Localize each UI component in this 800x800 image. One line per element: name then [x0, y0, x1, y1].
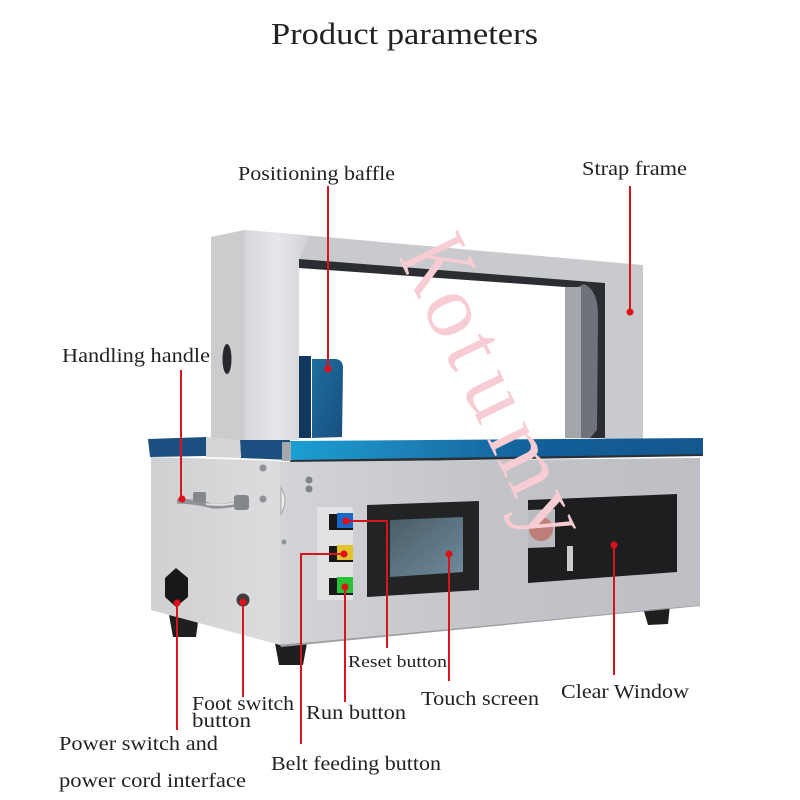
handling handle	[177, 492, 249, 510]
line: run	[344, 587, 346, 702]
strap frame	[211, 230, 643, 440]
line: touch	[448, 554, 450, 681]
label: positioning baffle: Positioning baffle	[238, 164, 395, 185]
button panel	[317, 507, 353, 600]
feet	[169, 605, 670, 665]
positioning baffle	[299, 356, 343, 438]
label: touch screen: Touch screen	[421, 689, 539, 710]
power socket	[165, 568, 188, 607]
label: clear window: Clear Window	[561, 682, 689, 703]
line: belt feeding	[301, 554, 344, 744]
label: strap frame: Strap frame	[582, 159, 687, 180]
machine	[148, 230, 703, 665]
label: foot switch button: Foot switch	[192, 694, 294, 715]
label: foot switch button	[192, 694, 294, 732]
line: power	[176, 603, 178, 730]
line: strap frame	[629, 186, 631, 312]
machine body	[151, 457, 700, 647]
line: positioning baffle	[327, 186, 329, 369]
label: reset button: Reset button	[348, 652, 448, 671]
label: run button: Run button	[306, 703, 406, 724]
line: handling handle	[180, 370, 182, 499]
label: power switch: Power switch and	[59, 734, 218, 755]
line: foot switch	[242, 602, 244, 697]
callout dots	[174, 308, 634, 606]
line: clear	[613, 545, 615, 675]
line: reset	[346, 521, 387, 648]
label: belt feeding button: Belt feeding button	[271, 754, 441, 775]
foot switch	[236, 594, 250, 606]
clear window	[528, 494, 677, 583]
label: power switch	[59, 734, 246, 792]
watermark: otumy	[403, 269, 610, 555]
label: handling handle: Handling handle	[62, 346, 210, 367]
watermark: K	[378, 218, 499, 310]
label: foot switch button: button	[192, 711, 251, 732]
callout lines	[177, 186, 630, 744]
touch screen	[367, 501, 479, 597]
title: Product parameters	[271, 16, 538, 51]
table top	[148, 437, 703, 463]
label: power switch: power cord interface	[59, 771, 246, 792]
